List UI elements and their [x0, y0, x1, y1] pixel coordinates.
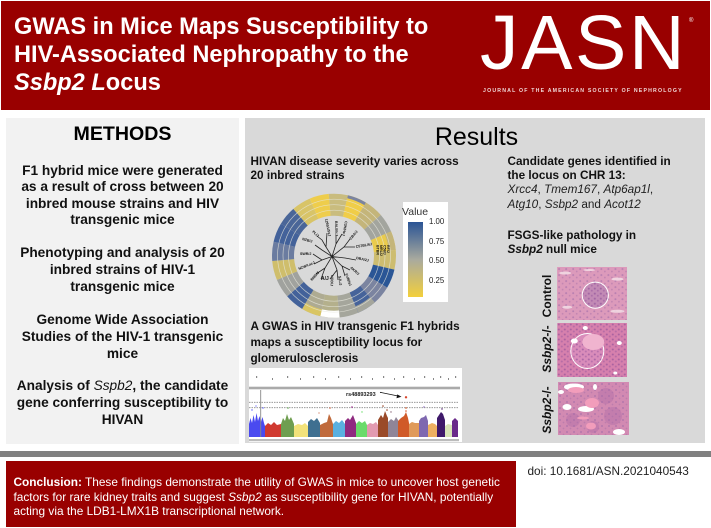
method 2 text: transgenic mice: [70, 279, 175, 294]
heading: candidate genes: Xrcc4, Tmem167, Atp6ap1l,: [508, 183, 653, 196]
chart: circular heatmap: BTBR: [376, 245, 380, 255]
title: [14, 14, 428, 96]
chart: circular heatmap: AKR/J: [349, 266, 360, 276]
heading: FSGS pathology: FSGS-like pathology in: [508, 228, 636, 242]
method 3 text: Genome Wide Association: [36, 312, 208, 327]
heading: methods: METHODS: [74, 123, 171, 145]
heading: GWAS: A GWAS in HIV transgenic F1 hybrids: [250, 320, 460, 333]
heading: GWAS: [250, 320, 460, 365]
chart: circular heatmap: FVB/NJ: [344, 273, 352, 286]
legend: value: 0.50: [429, 256, 444, 265]
heading: severity: 20 inbred strains: [250, 169, 345, 182]
chart: circular heatmap: SWR/J: [300, 252, 311, 256]
method 1 text: F1 hybrid mice were generated: [22, 163, 223, 178]
method 1 text: inbred mouse strains and HIV: [26, 196, 219, 211]
logo: JASN: ®: [689, 18, 693, 24]
legend: value: 0.75: [429, 237, 444, 246]
heading: FSGS pathology: Ssbp2 null mice: [508, 243, 597, 256]
title: Ssbp2 Locus: [14, 70, 161, 96]
heading: severity: [250, 155, 459, 182]
panel: results: [245, 118, 705, 443]
panel: methods: [6, 118, 239, 444]
method 2 text: [20, 245, 225, 294]
chart: circular heatmap: DBA/2J: [356, 256, 369, 263]
heading: candidate genes: Atg10, Ssbp2 and Acot12: [508, 198, 641, 211]
histology: control: [557, 267, 627, 320]
divider band: [0, 451, 711, 456]
legend: value: 1.00: [429, 217, 444, 226]
method 4 text: Analysis of Sspb2, the candidate: [17, 378, 228, 393]
heading: candidate genes: the locus on CHR 13:: [508, 169, 626, 182]
title: GWAS in Mice Maps Susceptibility to: [14, 14, 428, 40]
chart: Manhattan plot: [249, 368, 462, 442]
chart: circular heatmap: C57BL/6J: [355, 242, 372, 249]
chart: circular heatmap: A/J: [321, 276, 329, 282]
title: HIV-Associated Nephropathy to the: [14, 42, 409, 68]
method 1 text: transgenic mice: [70, 212, 175, 227]
chart: circular heatmap: [272, 194, 396, 318]
chart: circular heatmap: BALB/cJ: [334, 221, 339, 236]
conclusion box: [6, 461, 516, 527]
method 2 text: inbred strains of HIV-1: [50, 262, 195, 277]
legend: value: [403, 202, 448, 302]
heading: FSGS pathology: [508, 228, 636, 256]
method 1 text: as a result of cross between 20: [21, 179, 224, 194]
conclusion text: [14, 475, 500, 518]
method 4 text: [17, 378, 228, 427]
heading: severity: HIVAN disease severity varies across: [250, 155, 459, 168]
chart: circular heatmap: CBA/J: [349, 230, 359, 241]
header banner: [1, 1, 710, 110]
label: control: Control: [540, 275, 554, 317]
heading: GWAS: maps a susceptibility locus for: [250, 336, 422, 349]
histology: Ssbp2 knockout casts: [558, 382, 629, 435]
heading: results: Results: [435, 123, 518, 151]
chart: circular heatmap: C3H/HeJ: [341, 221, 348, 236]
logo: JASN: JASN: [480, 0, 687, 86]
conclusion text: Conclusion: These findings demonstrate the utility of GWAS in mice to uncover host genetic: [14, 475, 500, 489]
legend: value: 0.25: [429, 276, 444, 285]
chart: circular heatmap: NZW/LacJ: [298, 261, 315, 271]
chart: circular heatmap: NOD/J: [330, 275, 334, 286]
heading: GWAS: glomerulosclerosis: [250, 352, 358, 365]
method 2 text: Phenotyping and analysis of 20: [20, 245, 225, 260]
method 4 text: HIVAN: [102, 412, 143, 427]
method 3 text: Studies of the HIV-1 transgenic: [22, 329, 223, 344]
conclusion text: factors for rare kidney traits and suggest Ssbp2 as susceptibility gene for HIVAN, potentially: [14, 490, 493, 504]
chart: circular heatmap: 129S1/SvJ: [324, 218, 332, 237]
legend: value: Value: [402, 206, 428, 218]
method 3 text: mice: [107, 346, 138, 361]
heading: candidate genes: [507, 155, 671, 211]
heading: candidate genes: Candidate genes identified in: [508, 155, 671, 168]
chart: circular heatmap: PL/J: [311, 230, 320, 238]
chart: circular heatmap: SJL/J: [338, 276, 342, 286]
label: Ssbp2 knockout 1: Ssbp2-/-: [540, 325, 554, 372]
method 1 text: [21, 163, 224, 227]
histology: Ssbp2 knockout glomerulus: [557, 323, 627, 377]
chart: circular heatmap: NZB/J: [302, 237, 313, 244]
label: Ssbp2 knockout 2: Ssbp2-/-: [540, 386, 554, 434]
method 4 text: gene conferring susceptibility to: [17, 395, 228, 410]
conclusion text: acting via the LDB1-LMX1B transcriptional network.: [14, 504, 284, 518]
chart: circular heatmap: RIIIS/J: [310, 271, 320, 282]
doi: doi: 10.1681/ASN.2021040543: [528, 464, 689, 478]
chart: circular heatmap: RF/J: [386, 245, 390, 253]
chart: circular heatmap: MRL/J: [379, 245, 383, 256]
chart: Manhattan plot: rs48893293: [346, 392, 376, 398]
logo: JASN: JOURNAL OF THE AMERICAN SOCIETY OF NEPHROLOGY: [483, 88, 683, 94]
method 3 text: [22, 312, 223, 361]
chart: circular heatmap: C58/J: [382, 245, 386, 255]
